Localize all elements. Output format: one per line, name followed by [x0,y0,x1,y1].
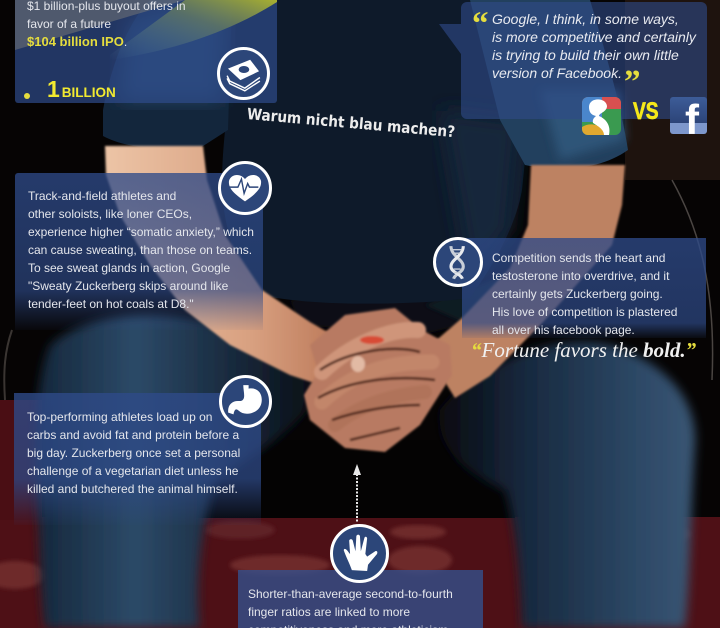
sweating text [28,189,254,311]
clasped hands [304,308,452,452]
carbs text [27,410,240,496]
quote text: Google, I think, in some ways, [492,11,679,27]
callout: Fortune favors the bold: “Fortune favors the bold.” [471,338,696,362]
growth chart graphic [15,0,277,54]
competition text [492,251,677,337]
competition text: His love of competition is plastered [492,305,677,319]
sweating text: Track-and-field athletes and [28,189,176,203]
VS label: VS [633,98,659,125]
quote text [492,11,696,81]
opening quote mark: “ [472,6,488,42]
left arm [105,146,350,385]
carbs text: challenge of a vegetarian diet unless he [27,464,238,478]
speech pointer [439,24,461,54]
left sleeve [103,0,232,150]
icon: Facebook [670,97,707,134]
right arm [425,165,625,398]
text: buyout offers: $104 billion IPO. [27,34,127,49]
text: buyout offers [27,0,186,49]
competition text: all over his facebook page. [492,323,635,337]
carbs text: carbs and avoid fat and protein before a [27,428,239,442]
sweating text: tender-feet on hot coals at D8." [28,297,194,311]
quote text: version of Facebook. [492,65,622,81]
icon: money stack [217,47,270,100]
competition text: Competition sends the heart and [492,251,665,265]
sweating text: other soloists, like loner CEOs, [28,207,192,221]
panel: Google quote [461,2,707,119]
sweating text: "Sweaty Zuckerberg skips around like [28,279,228,293]
icon: heart with pulse [218,161,272,215]
closing quote mark: ” [624,64,640,100]
competition text: testosterone into overdrive, and it [492,269,669,283]
t-shirt [103,0,628,304]
icon: Google [582,97,621,135]
panel: competition [462,238,706,338]
panel: sweating [15,173,263,330]
carbs text: big day. Zuckerberg once set a personal [27,446,240,460]
torso [222,0,530,304]
sweating text: experience higher “somatic anxiety,” which [28,225,254,239]
panel: finger ratios [238,570,483,628]
arrow: dotted up arrow [353,464,361,522]
finger ratios text: Shorter-than-average second-to-fourth [248,587,453,601]
panel: IPO buyout offers [15,0,277,103]
icon: hand [330,524,389,583]
icon: stomach [219,375,272,428]
sweating text: can cause sweating, than those on teams. [28,243,252,257]
text: buyout offers: favor of a future [27,17,111,31]
chart marker dot [24,93,30,99]
panel: carbs [14,393,261,525]
shirt slogan: Warum nicht blau machen? [246,105,456,141]
competition text: certainly gets Zuckerberg going. [492,287,663,301]
chart label: 1 billion: 1BILLION [47,76,116,102]
carbs text: Top-performing athletes load up on [27,410,212,424]
carpet [0,400,720,628]
waist and dark thigh [290,295,470,335]
quote text: is more competitive and certainly [492,29,696,45]
finger ratios text [248,587,453,628]
jeans left [35,315,320,628]
dark seat shadow between legs [195,440,515,518]
carbs text: killed and butchered the animal himself. [27,482,238,496]
right sleeve [470,0,628,169]
sweating text: To see sweat glands in action, Google [28,261,230,275]
jeans right [440,342,695,628]
chair [4,180,713,400]
quote text: is trying to build their own little [492,47,679,63]
finger ratios text: finger ratios are linked to more [248,605,410,619]
icon: DNA helix [433,237,483,287]
